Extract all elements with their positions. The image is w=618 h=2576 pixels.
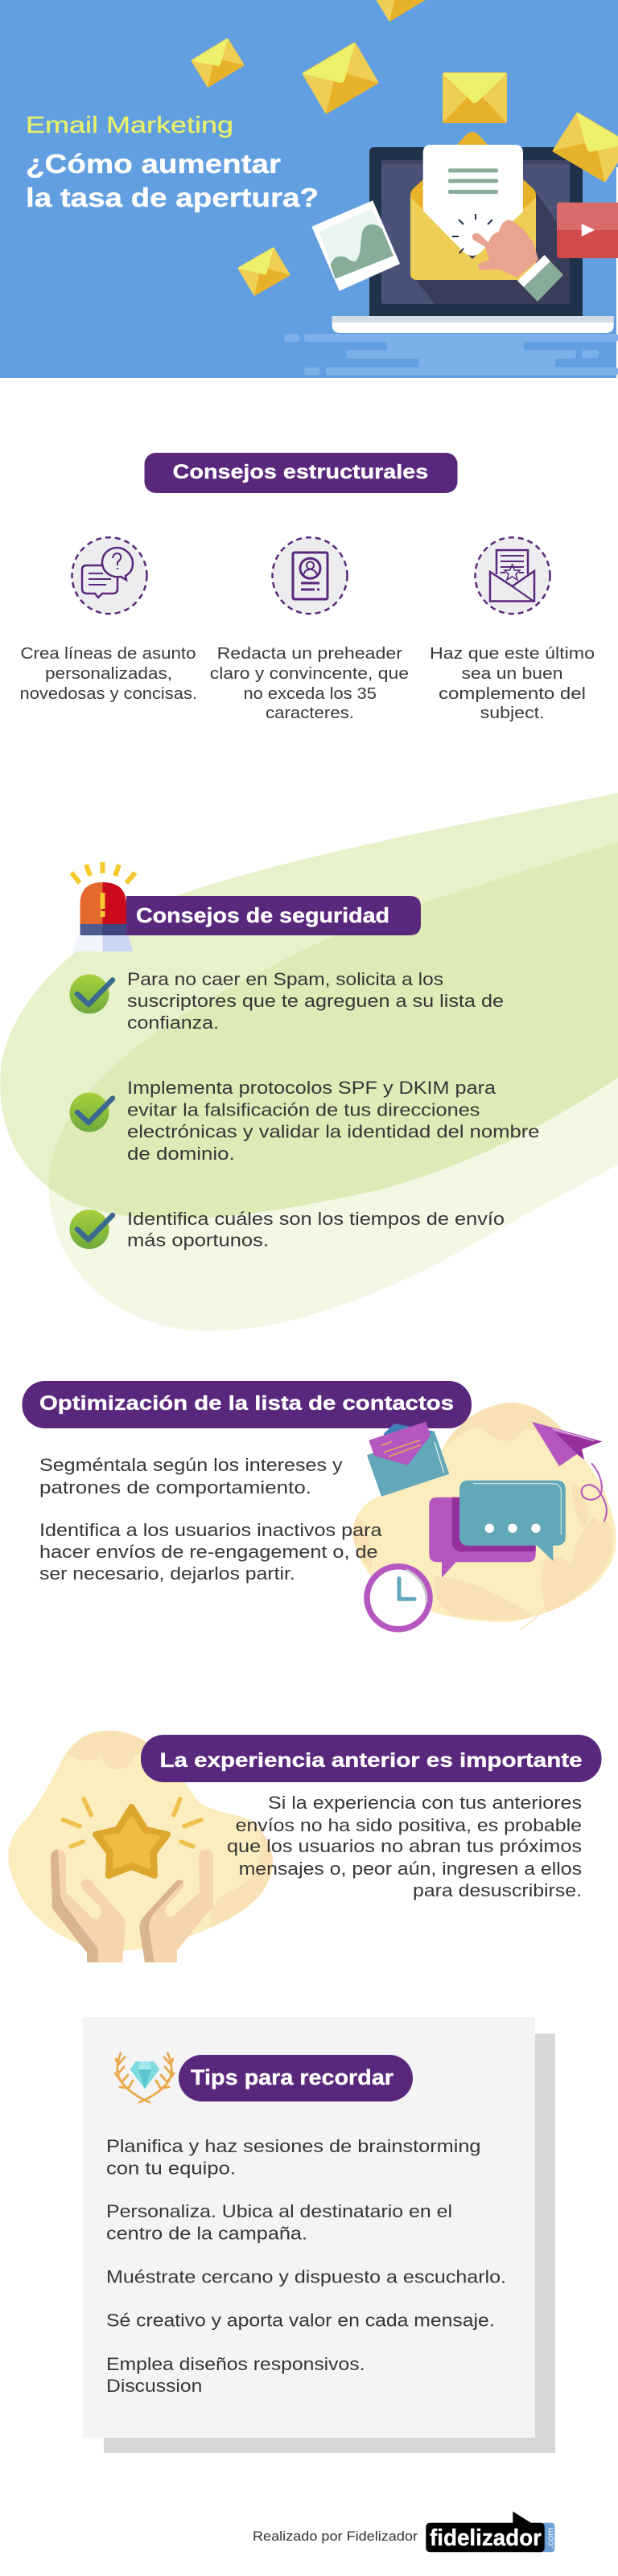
text block: Identifica cuáles son los tiempos de envío bbox=[127, 1209, 505, 1229]
header banner bbox=[0, 0, 618, 378]
text: preheader: Redacta un preheader bbox=[217, 644, 402, 663]
logo: fidelizador: .com bbox=[546, 2528, 555, 2549]
icon: speech bubbles with question bbox=[72, 537, 146, 614]
icon: clock bbox=[367, 1567, 430, 1629]
heading bbox=[141, 1735, 602, 1782]
text: subject: sea un buen bbox=[462, 664, 563, 683]
text block: centro de la campaña. bbox=[106, 2223, 307, 2244]
text: preheader: no exceda los 35 bbox=[243, 684, 377, 703]
text block: mensajes o, peor aún, ingresen a ellos bbox=[239, 1859, 582, 1879]
text: subject: Haz que este último bbox=[430, 644, 595, 663]
title: ¿Cómo aumentar bbox=[26, 149, 281, 179]
text block: evitar la falsificación de tus direcciones bbox=[127, 1100, 480, 1120]
icon: chart card bbox=[311, 200, 400, 291]
text block: que los usuarios no abran tus próximos bbox=[227, 1836, 582, 1856]
panel: optimización de la lista de contactos bbox=[23, 1381, 616, 1629]
text block bbox=[227, 1793, 582, 1900]
text block bbox=[127, 1209, 505, 1250]
text block: Sé creativo y aporta valor en cada mensaje. bbox=[106, 2310, 495, 2331]
text: preheader bbox=[210, 644, 409, 722]
heading bbox=[179, 2055, 413, 2101]
heading: Consejos de seguridad bbox=[136, 903, 389, 927]
green background shapes bbox=[0, 793, 618, 1331]
text: preheader: caracteres. bbox=[266, 704, 354, 722]
text block: Implementa protocolos SPF y DKIM para bbox=[127, 1078, 496, 1098]
water stripes bbox=[284, 334, 618, 375]
cream blob bbox=[8, 1721, 282, 1951]
text block: Identifica a los usuarios inactivos para bbox=[39, 1520, 382, 1540]
text: subject bbox=[430, 644, 595, 722]
item: protocolos bbox=[69, 1078, 539, 1164]
text block: Segméntala según los intereses y bbox=[39, 1455, 343, 1475]
text block: ser necesario, dejarlos partir. bbox=[39, 1563, 295, 1584]
text block: confianza. bbox=[127, 1013, 219, 1033]
footer credit: Realizado por Fidelizador bbox=[253, 2529, 418, 2544]
cream blob bbox=[346, 1391, 616, 1629]
text: asunto: Crea líneas de asunto bbox=[21, 644, 196, 663]
heading: Consejos estructurales bbox=[173, 461, 428, 483]
text block: más oportunos. bbox=[127, 1230, 269, 1250]
title bbox=[26, 149, 319, 212]
icon: laptop with open envelope bbox=[332, 132, 614, 333]
text block: electrónicas y validar la identidad del nombre bbox=[127, 1121, 539, 1142]
panel: consejos de seguridad bbox=[0, 793, 618, 1331]
text block: hacer envíos de re-engagement o, de bbox=[39, 1542, 378, 1562]
card bbox=[83, 2017, 535, 2438]
text block bbox=[39, 1455, 382, 1584]
text block: Personaliza. Ubica al destinatario en el bbox=[106, 2201, 452, 2221]
logo: fidelizador bbox=[426, 2512, 555, 2552]
icon: paper plane bbox=[532, 1422, 607, 1522]
panel: consejos estructurales bbox=[19, 453, 595, 722]
icon: check bbox=[69, 1210, 113, 1249]
text: subject: complemento del bbox=[439, 684, 586, 703]
icon: alarm siren bbox=[72, 862, 135, 951]
text block bbox=[127, 1078, 539, 1164]
text block: con tu equipo. bbox=[106, 2159, 236, 2178]
icon: check bbox=[69, 1092, 113, 1132]
text block: patrones de comportamiento. bbox=[39, 1477, 311, 1498]
icon: chat bubbles bbox=[429, 1481, 566, 1578]
heading: La experiencia anterior es importante bbox=[159, 1749, 583, 1772]
text: preheader: claro y convincente, que bbox=[210, 664, 409, 683]
item: spam bbox=[69, 969, 504, 1033]
logo: fidelizador: fidelizador bbox=[430, 2525, 542, 2551]
panel: la experiencia anterior es importante bbox=[8, 1721, 601, 1962]
text block: Muéstrate cercano y dispuesto a escucharlo. bbox=[106, 2266, 506, 2287]
text block: Planifica y haz sesiones de brainstorming bbox=[106, 2136, 481, 2156]
text: asunto bbox=[19, 644, 197, 703]
icon: diamond with laurel bbox=[115, 2053, 174, 2102]
subtitle: Email Marketing: Email Marketing bbox=[26, 113, 233, 138]
heading bbox=[145, 453, 457, 493]
icon: contact card bbox=[272, 537, 348, 614]
heading: Tips para recordar bbox=[191, 2065, 394, 2089]
heading: Optimización de la lista de contactos bbox=[39, 1392, 454, 1415]
heading bbox=[23, 1381, 472, 1428]
icon: floating envelopes bbox=[191, 0, 426, 296]
icon: open envelope bbox=[367, 1422, 449, 1497]
text block: Discussion bbox=[106, 2376, 202, 2396]
text: subject: subject. bbox=[480, 704, 545, 722]
text: asunto: personalizadas, bbox=[45, 664, 172, 683]
icon: check bbox=[69, 975, 113, 1013]
card shadow bbox=[104, 2033, 555, 2453]
text: asunto: novedosas y concisas. bbox=[19, 684, 197, 703]
panel: tips para recordar bbox=[83, 2017, 555, 2453]
text block: envíos no ha sido positiva, es probable bbox=[236, 1815, 582, 1835]
icon: hands holding star bbox=[51, 1799, 213, 1962]
title: la tasa de apertura? bbox=[26, 183, 319, 212]
text block: para desuscribirse. bbox=[413, 1880, 582, 1900]
text block: Si la experiencia con tus anteriores bbox=[268, 1793, 582, 1813]
text block: suscriptores que te agreguen a su lista de bbox=[127, 991, 504, 1011]
text block bbox=[127, 969, 504, 1033]
text block: Para no caer en Spam, solicita a los bbox=[127, 969, 443, 989]
icon: large envelopes right bbox=[443, 72, 618, 183]
item: tiempos bbox=[69, 1209, 505, 1250]
icon: video player bbox=[557, 203, 618, 258]
text block: Emplea diseños responsivos. bbox=[106, 2354, 365, 2374]
text block: de dominio. bbox=[127, 1144, 235, 1164]
heading bbox=[126, 896, 421, 935]
icon: envelope with star letter bbox=[475, 537, 550, 614]
text block bbox=[106, 2136, 506, 2396]
